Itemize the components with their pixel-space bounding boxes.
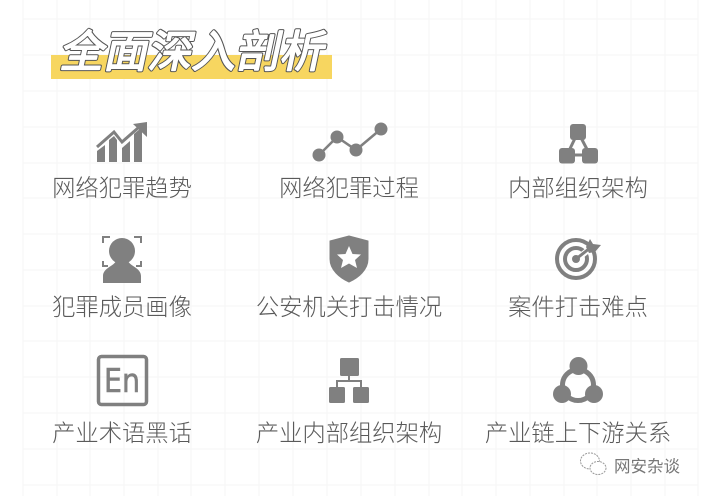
title highlight bar (51, 55, 332, 79)
icon: shield with star (330, 236, 368, 282)
icon: triangle of nodes (559, 124, 598, 164)
label: 公安机关打击情况 (256, 294, 442, 320)
label: 犯罪成员画像 (52, 294, 192, 320)
account name: 网安杂谈 (614, 457, 680, 476)
item: industry internal organisation (256, 358, 442, 446)
icon: En box: En (104, 361, 140, 400)
item: police crackdown (256, 236, 442, 320)
watermark (580, 453, 680, 476)
label: 产业链上下游关系 (485, 420, 671, 446)
icon: chat bubbles (580, 453, 606, 474)
icon: face scan person (103, 237, 141, 283)
icon: target with arrow (557, 239, 601, 278)
item: internal organisation (508, 124, 648, 201)
label: 内部组织架构 (508, 175, 648, 201)
label: 产业内部组织架构 (256, 420, 442, 446)
item: supply chain relations (485, 357, 671, 446)
label: 网络犯罪过程 (279, 175, 419, 201)
item: network crime trend (52, 122, 192, 201)
item: case difficulty (508, 239, 648, 320)
label: 产业术语黑话 (52, 420, 192, 446)
label: 网络犯罪趋势 (52, 175, 192, 201)
icon: hierarchy (329, 358, 369, 403)
label: 案件打击难点 (508, 294, 648, 320)
item: member profile (52, 237, 192, 320)
title text: 全面深入剖析 (57, 28, 331, 77)
item: network crime process (279, 122, 419, 201)
title banner (51, 28, 332, 79)
item: industry jargon (52, 356, 192, 446)
icon: connected nodes (312, 122, 388, 162)
icon: three linked circles (553, 357, 603, 403)
icon: rising chart (97, 122, 147, 162)
title text: 全面深入剖析 (57, 28, 331, 77)
